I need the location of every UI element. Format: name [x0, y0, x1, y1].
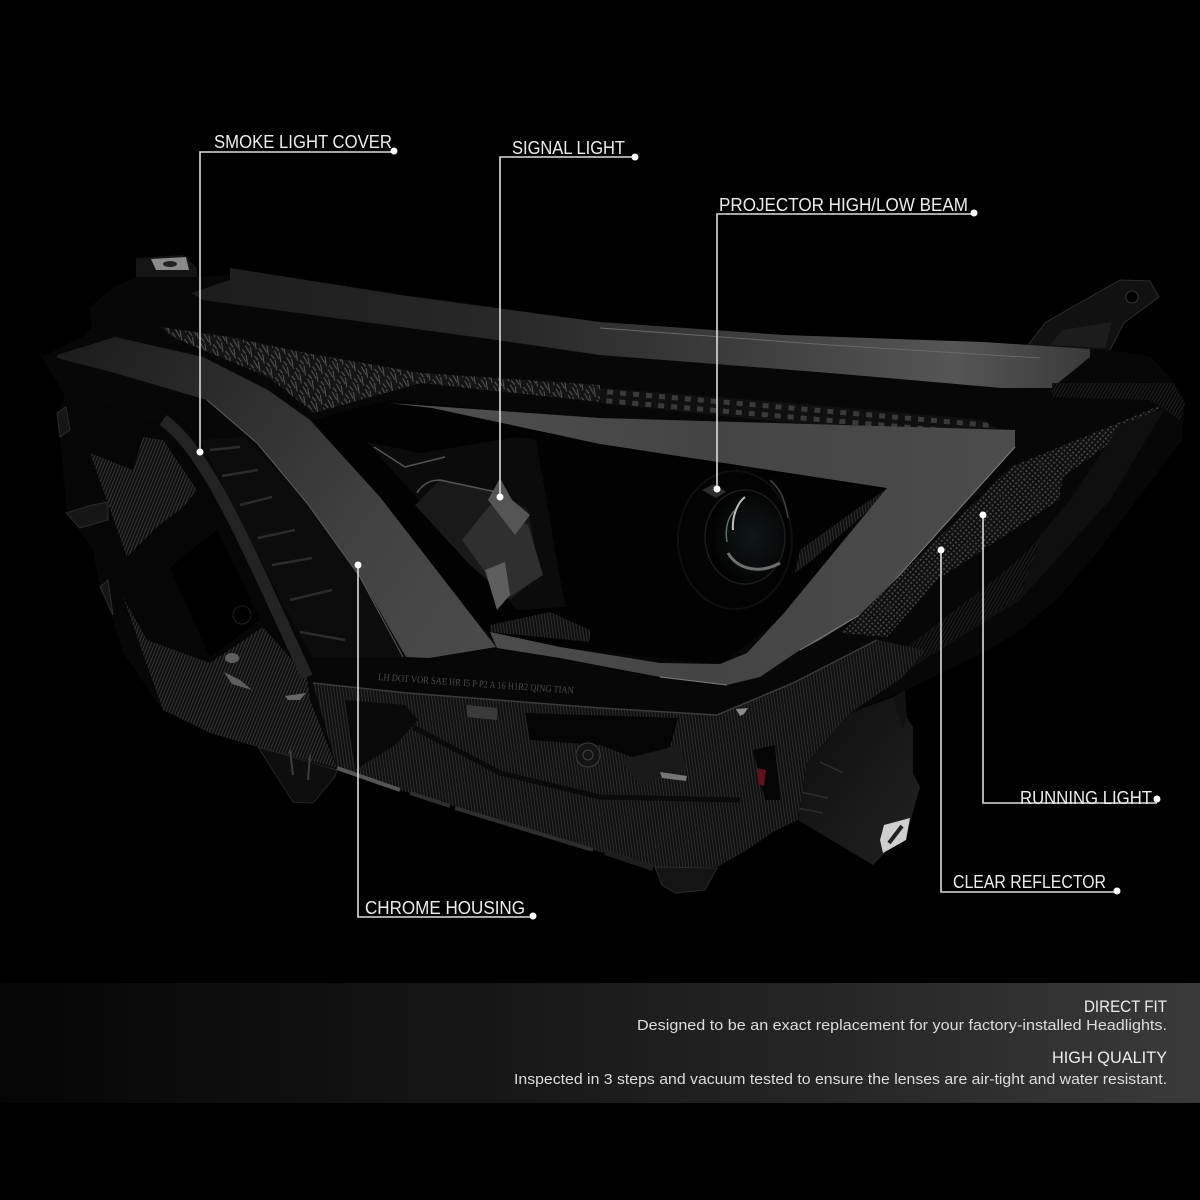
- text: high quality description: Inspected in 3 steps and vacuum tested to ensure the lenses are air-tight and water resistant.: [514, 1071, 1167, 1088]
- right lens panel: [890, 383, 1185, 675]
- callout: projector high/low beam: [714, 195, 978, 492]
- left smoke trim bar: [57, 337, 496, 658]
- left lens edge clips: [57, 407, 113, 615]
- left reflector area: [83, 403, 337, 768]
- divider bar of housing: [163, 420, 307, 677]
- headlight assembly: [42, 255, 1185, 893]
- lower lens hatched panel: [313, 640, 925, 867]
- callout: clear reflector: [938, 546, 1120, 894]
- top trim strip: [191, 268, 1090, 388]
- interior black cavity: [313, 400, 1010, 665]
- left top mounting bracket: [90, 255, 197, 327]
- crystal LED strip right: [600, 388, 1002, 432]
- projector beam lens: [678, 471, 792, 609]
- connector housing: [792, 690, 920, 865]
- panel: feature band: [0, 983, 1200, 1103]
- lens silhouette: [42, 268, 1185, 867]
- projector side fin: [795, 490, 885, 573]
- callout: clear reflector: CLEAR REFLECTOR: [953, 872, 1106, 892]
- signal light reflector: [367, 437, 590, 642]
- heading: direct fit: DIRECT FIT: [1084, 997, 1167, 1016]
- callout: running light: [980, 512, 1160, 808]
- lens code text: LH DOT VOR SAE HR I5 P P2 A 16 H1R2 QING TIAN: [378, 672, 574, 697]
- callout: smoke light cover: [196, 132, 398, 456]
- callout: projector high/low beam: PROJECTOR HIGH/LOW BEAM: [719, 195, 968, 215]
- callout: running light: RUNNING LIGHT: [1020, 788, 1152, 808]
- highlight on U trim: [660, 447, 1015, 685]
- trim lower edge highlight: [207, 400, 403, 657]
- callout: chrome housing: [354, 562, 536, 920]
- callout: smoke light cover: SMOKE LIGHT COVER: [214, 132, 392, 152]
- text: direct fit description: Designed to be an exact replacement for your factory-installed Headlights.: [637, 1017, 1167, 1034]
- lens bottom seam: [313, 640, 877, 715]
- crystal DRL strip: [161, 327, 600, 413]
- lower lens details: [345, 700, 780, 800]
- heading: high quality: HIGH QUALITY: [1052, 1048, 1167, 1067]
- callout: chrome housing: CHROME HOUSING: [365, 898, 525, 918]
- U-shaped chrome trim: [388, 403, 1015, 685]
- callout: signal light: [496, 138, 638, 500]
- lamp internal fins: [200, 437, 403, 657]
- right textured reflector: [841, 403, 1166, 637]
- strip highlight line: [600, 328, 1040, 358]
- callout: signal light: SIGNAL LIGHT: [512, 138, 625, 158]
- right top mounting bracket: [1027, 280, 1159, 352]
- lower left tab and clips: [258, 747, 717, 893]
